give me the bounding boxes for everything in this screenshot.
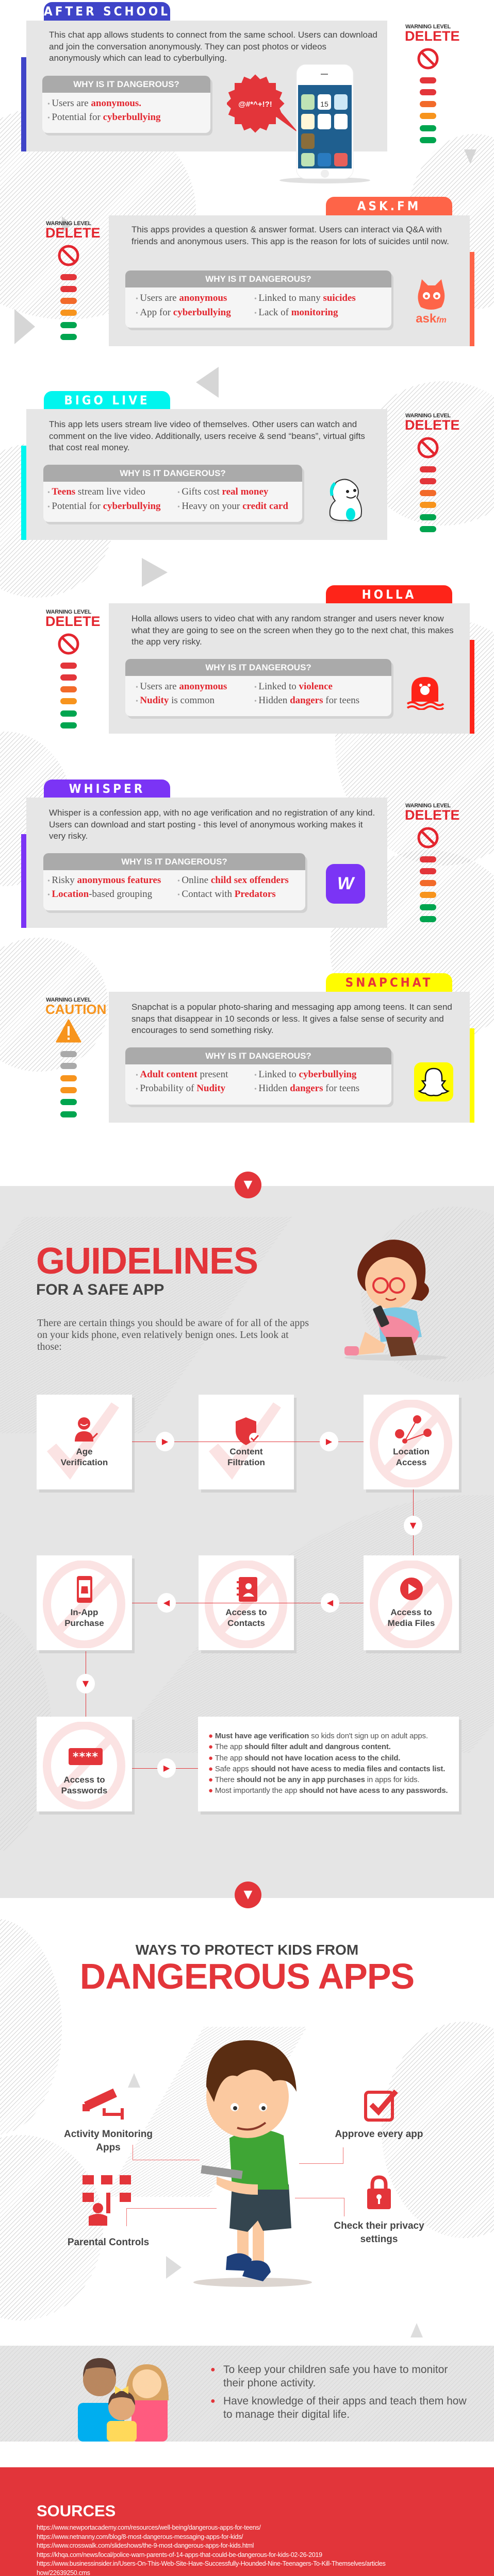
why dangerous box: WHY IS IT DANGEROUS? [205, 274, 311, 284]
text: guidelines intro: There are certain things you should be aware of for all of the apps on your kids phone, even relatively benign ones. Lets look at those: [37, 1317, 309, 1352]
icon: padlock [367, 2175, 391, 2209]
arrow: down to passwords [76, 1674, 95, 1693]
warning level: delete: DELETE [45, 225, 101, 241]
why dangerous box: Lack of monitoring [258, 307, 338, 318]
text: family tips: Have knowledge of their apps and teach them how to manage their digital life. [223, 2395, 467, 2420]
illustration: boy with phone [193, 2040, 312, 2287]
card: location access: Location [393, 1447, 430, 1456]
warning level: delete: DELETE [405, 807, 460, 823]
why dangerous box: Nudity is common [140, 695, 215, 706]
illustration: girl with phone [344, 1240, 448, 1361]
text block: guidelines summary [198, 1717, 459, 1811]
warning level: delete: WARNING LEVEL [46, 221, 91, 227]
arrow: down to passwords: ▼ [83, 1679, 89, 1688]
card: access to passwords [37, 1717, 132, 1811]
why dangerous box: WHY IS IT DANGEROUS? [121, 857, 227, 867]
panel: bigo live [21, 391, 460, 540]
connector: activity monitoring [133, 2145, 200, 2160]
arrow: down to media files: ▼ [410, 1520, 416, 1530]
card: age verification: Verification [61, 1458, 108, 1467]
text block: guidelines summary: ● The app should not have location acess to the child. [208, 1754, 400, 1762]
why dangerous box [43, 853, 305, 910]
flow connectors row 2 [76, 1593, 364, 1717]
icon: parental controls [83, 2175, 131, 2226]
arrow: to contacts [157, 1593, 176, 1613]
warning level: delete [405, 803, 460, 922]
why dangerous box: Users are anonymous [140, 293, 227, 303]
why dangerous box [42, 76, 210, 133]
item: approve every app: Approve every app [335, 2129, 423, 2140]
text: source urls: https://www.businessinsider.in/Users-On-This-Web-Site-Have-Successfully-Hounded-Nine-Teenagers-To-Kill-Themselves/articles [37, 2560, 386, 2567]
tab: snapchat: SNAPCHAT [345, 975, 433, 990]
why dangerous box: Users are anonymous [140, 681, 227, 692]
panel: snapchat [45, 973, 474, 1123]
why dangerous box: WHY IS IT DANGEROUS? [205, 663, 311, 672]
arrow: section divider [235, 1172, 261, 1198]
arrow: to location access [320, 1432, 338, 1451]
why dangerous box: Location-based grouping [52, 889, 152, 900]
why dangerous box: WHY IS IT DANGEROUS? [120, 468, 226, 478]
background hatch decorations [0, 111, 494, 1072]
arrow: to location access: ▶ [326, 1436, 332, 1446]
icon: whisper logo [326, 864, 365, 904]
icon: ask.fm owl: askfm [416, 312, 447, 326]
text: family tips [210, 2364, 467, 2420]
icon: ask.fm owl [416, 279, 447, 326]
heading: ways to protect kids from dangerous apps: DANGEROUS APPS [80, 1956, 414, 1996]
icon: starburst callout [227, 74, 296, 133]
why dangerous box: Risky anonymous features [52, 875, 161, 886]
card: access to passwords: Access to [63, 1775, 105, 1785]
tab: ask.fm [326, 197, 452, 215]
text: source urls: https://www.netnanny.com/blog/8-most-dangerous-messaging-apps-for-kids/ [37, 2533, 243, 2540]
why dangerous box: Users are anonymous. [52, 98, 141, 109]
text: source urls: https://www.crosswalk.com/slideshows/the-9-most-dangerous-apps-for-kids.html [37, 2542, 254, 2549]
warning level: delete [405, 24, 460, 143]
panel: holla [45, 585, 474, 734]
why dangerous box: Gifts cost real money [182, 486, 268, 497]
why dangerous box: Online child sex offenders [182, 875, 289, 886]
why dangerous box: Hidden dangers for teens [258, 1083, 359, 1094]
text block: guidelines summary: ● There should not be any in app purchases in apps for kids. [208, 1775, 419, 1784]
icon: phone: 15 [320, 100, 328, 108]
card: access to media files: Media Files [388, 1618, 435, 1628]
panel: family tips [0, 2346, 494, 2442]
item: approve every app [335, 2090, 423, 2140]
arrow: to in-app purchase: ◀ [327, 1598, 333, 1607]
why dangerous box [125, 270, 391, 328]
card: access to contacts [199, 1555, 294, 1650]
why dangerous box: WHY IS IT DANGEROUS? [205, 1051, 311, 1061]
arrow: to content filtration [156, 1432, 174, 1451]
icon: holla ghost [406, 677, 444, 710]
text: source urls: https://www.newportacademy.com/resources/well-being/dangerous-apps-for-teens/ [37, 2524, 261, 2531]
panel: ask.fm [45, 197, 474, 346]
item: activity monitoring apps [64, 2089, 153, 2153]
warning level: delete: WARNING LEVEL [405, 24, 451, 30]
heading: guidelines: FOR A SAFE APP [36, 1281, 164, 1298]
description: Holla allows users to video chat with any random stranger and users never know what they are going to see on the screen when they go to the next chat, this makes the app very risky. [131, 614, 454, 647]
icon: snapchat logo [414, 1062, 453, 1101]
description: Whisper is a confession app, with no age verification and no registration of any kind. Users can download and start posting - this level of anonymous working makes it very risky. [49, 808, 375, 841]
why dangerous box: WHY IS IT DANGEROUS? [73, 79, 179, 89]
description: Snapchat is a popular photo-sharing and messaging app among teens. It can send snaps that disappear in 10 seconds or less. It gives a false sense of security and encourages to send something risky. [131, 1002, 452, 1035]
tab: snapchat [326, 973, 452, 992]
card: in-app purchase [37, 1555, 132, 1650]
description: This chat app allows students to connect from the same school. Users can download and join the conversation anonymously. They can post photos or videos anonymously which can lead to cyberbullying. [49, 30, 377, 63]
tab: holla [326, 585, 452, 604]
arrow: section divider: ▼ [244, 1178, 252, 1191]
card: access to passwords: **** [73, 1751, 98, 1764]
tab: whisper [44, 779, 170, 798]
warning level: caution: WARNING LEVEL [46, 997, 91, 1003]
icon: phone [279, 65, 370, 183]
warning level: delete: WARNING LEVEL [46, 609, 91, 615]
illustration: family [78, 2358, 169, 2442]
why dangerous box [125, 659, 391, 716]
panel: after school [21, 2, 460, 183]
card: access to media files: Access to [390, 1607, 432, 1617]
card: content filtration: Content [229, 1447, 263, 1456]
card: in-app purchase: Purchase [64, 1618, 104, 1628]
card: age verification [37, 1395, 132, 1489]
warning level: delete: WARNING LEVEL [405, 413, 451, 419]
tab: ask.fm: ASK.FM [357, 199, 421, 213]
warning level: delete: DELETE [405, 417, 460, 433]
card: content filtration: Filtration [227, 1458, 265, 1467]
arrow: to guidelines summary: ▶ [163, 1763, 170, 1773]
card: location access [364, 1395, 459, 1489]
protect section decorations [0, 1919, 494, 2337]
arrow: to content filtration: ▶ [162, 1436, 168, 1446]
text block: guidelines summary: ● The app should filter adult and dangrous content. [208, 1742, 391, 1751]
tab: bigo live [44, 391, 170, 410]
flow connectors row 1 [132, 1432, 422, 1555]
arrow: section divider 2: ▼ [244, 1888, 252, 1901]
tab: bigo live: BIGO LIVE [64, 393, 150, 408]
why dangerous box: Potential for cyberbullying [52, 112, 161, 123]
connector: privacy [295, 2198, 344, 2216]
item: activity monitoring apps: Apps [96, 2142, 121, 2153]
card: access to passwords: Passwords [61, 1786, 107, 1795]
arrow: to in-app purchase [321, 1593, 339, 1613]
footer: sources [0, 2467, 494, 2576]
section: guidelines background [0, 1186, 494, 1898]
arrow: down to media files [404, 1516, 422, 1535]
why dangerous box: Heavy on your credit card [182, 501, 288, 512]
tab: holla: HOLLA [362, 587, 416, 602]
arrow: to contacts: ◀ [163, 1598, 170, 1607]
arrow: section divider 2 [235, 1882, 261, 1908]
why dangerous box: Contact with Predators [182, 889, 276, 900]
text: family tips: ● [210, 2397, 216, 2405]
card: content filtration [199, 1395, 294, 1489]
text: source urls: https://khqa.com/news/local/police-warn-parents-of-14-apps-that-could-be-dangerous-for-kids-02-26-2019 [37, 2551, 322, 2558]
warning level: delete [45, 609, 101, 728]
text block: guidelines summary: ● Safe apps should not have acess to media files and contacts list. [208, 1765, 445, 1773]
item: parental controls: Parental Controls [68, 2237, 149, 2248]
why dangerous box: Adult content present [140, 1069, 228, 1080]
card: access to contacts: Contacts [227, 1618, 265, 1628]
why dangerous box [125, 1047, 391, 1105]
why dangerous box: Teens stream live video [52, 486, 145, 497]
why dangerous box: Probability of Nudity [140, 1083, 225, 1094]
item: activity monitoring apps: Activity Monitoring [64, 2129, 153, 2140]
why dangerous box: Linked to violence [258, 681, 333, 692]
text block: guidelines summary: ● Must have age verification so kids don't sign up on adult apps. [208, 1732, 428, 1740]
icon: checkbox [364, 2090, 398, 2122]
warning level: delete: DELETE [45, 614, 101, 629]
tab: after school: AFTER SCHOOL [44, 4, 170, 19]
icon: cctv camera [83, 2089, 124, 2120]
heading: guidelines: GUIDELINES [36, 1241, 258, 1282]
card: in-app purchase: In-App [71, 1607, 98, 1617]
connector: approve [299, 2147, 343, 2164]
heading: sources: SOURCES [37, 2502, 116, 2520]
description: This app lets users stream live video of themselves. Other users can watch and comment on the live video. Additionally, users receive & send “beans”, virtual gifts that cost real money. [49, 419, 365, 452]
why dangerous box: Potential for cyberbullying [52, 501, 161, 512]
warning level: caution [45, 997, 106, 1117]
warning level: delete [45, 221, 101, 340]
card: access to media files [364, 1555, 459, 1650]
panel: whisper [21, 779, 460, 928]
warning level: delete: WARNING LEVEL [405, 803, 451, 809]
warning level: caution: CAUTION [45, 1002, 106, 1017]
item: check privacy settings [334, 2175, 424, 2245]
card: access to contacts: Access to [225, 1607, 267, 1617]
tab: whisper: WHISPER [69, 782, 145, 796]
text: family tips: ● [210, 2365, 216, 2374]
warning level: delete: DELETE [405, 28, 460, 44]
why dangerous box: App for cyberbullying [140, 307, 231, 318]
card: age verification: Age [76, 1447, 93, 1456]
icon: starburst callout: @#*^+!?! [238, 100, 272, 109]
description: This apps provides a question & answer format. Users can interact via Q&A with friends and anonymous users. This app is the reason for lots of suicides until now. [131, 225, 449, 246]
card: location access: Access [396, 1458, 426, 1467]
text block: guidelines summary: ● Most importantly the app should not have acess to any passwords. [208, 1786, 448, 1795]
icon: whisper logo: W [337, 874, 354, 893]
heading: ways to protect kids from dangerous apps: WAYS TO PROTECT KIDS FROM [136, 1942, 358, 1958]
icon: bigo mascot [329, 479, 362, 523]
item: parental controls [68, 2175, 149, 2248]
connector: parental controls [126, 2208, 217, 2226]
text: family tips: To keep your children safe you have to monitor their phone activity. [223, 2364, 448, 2389]
item: check privacy settings: settings [360, 2234, 398, 2245]
why dangerous box: Hidden dangers for teens [258, 695, 359, 706]
item: check privacy settings: Check their privacy [334, 2221, 424, 2231]
text: source urls [37, 2524, 386, 2576]
why dangerous box: Linked to cyberbullying [258, 1069, 356, 1080]
why dangerous box: Linked to many suicides [258, 293, 356, 303]
why dangerous box [43, 465, 302, 522]
warning level: delete [405, 413, 460, 532]
